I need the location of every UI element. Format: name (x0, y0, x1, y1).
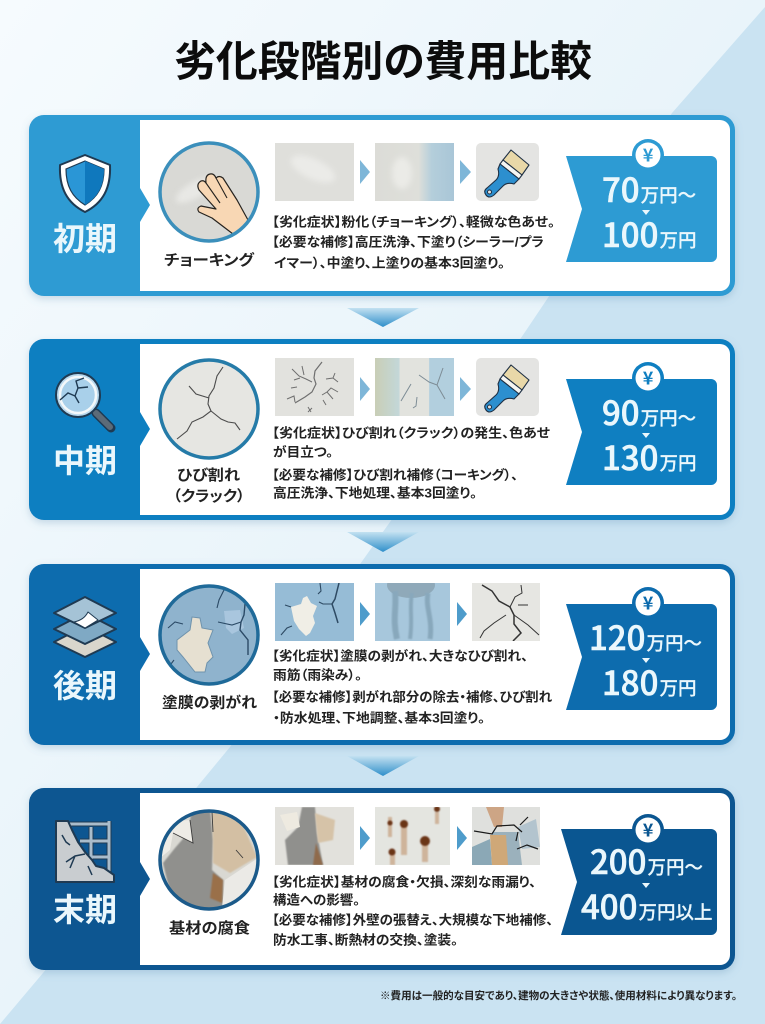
arrow (360, 377, 370, 401)
description: 【必要な補修】外壁の張替え、大規模な下地補修、 (272, 912, 553, 928)
caption: チョーキング (164, 251, 255, 269)
thumbnail: corroded wall (275, 807, 354, 865)
description: 防水工事、断熱材の交換、塗装。 (273, 932, 458, 948)
caption: 基材の腐食 (169, 919, 250, 937)
yen icon: ¥ (643, 142, 654, 168)
circle image: peeling paint (160, 586, 258, 684)
arrow (457, 602, 467, 626)
thumbnail: rain streaks (375, 583, 450, 641)
price badge: 120万円～ (589, 612, 702, 660)
icon: layers (54, 597, 116, 657)
stage label: 後期 (53, 668, 117, 704)
description (272, 648, 552, 726)
thumbnail: rust stains (375, 807, 450, 865)
panel frame: 末期 (29, 788, 735, 970)
description: 【劣化症状】塗膜の剥がれ、大きなひび割れ、 (272, 648, 528, 664)
circle image: chalking hand (160, 143, 258, 241)
price badge (566, 139, 717, 262)
arrow (347, 756, 419, 776)
description: 高圧洗浄、下地処理、基本3回塗り。 (273, 486, 477, 500)
description: 【必要な補修】剥がれ部分の除去・補修、ひび割れ (272, 690, 552, 704)
description (272, 874, 553, 948)
description (272, 214, 555, 270)
price badge: 180万円 (602, 657, 696, 705)
circle image: corroded substrate (160, 808, 258, 912)
description: 【劣化症状】基材の腐食・欠損、深刻な雨漏り、 (272, 874, 536, 890)
arrow (460, 160, 471, 184)
description: 【劣化症状】ひび割れ（クラック）の発生、色あせ (272, 426, 551, 440)
yen icon: ¥ (643, 590, 654, 616)
yen icon (632, 139, 664, 171)
arrow (347, 308, 419, 327)
white content area (140, 120, 730, 291)
caption (173, 467, 245, 505)
yen icon (632, 814, 664, 846)
arrow (347, 532, 419, 552)
white content area (140, 793, 730, 965)
description: が目立つ。 (273, 444, 333, 460)
thumbnail: repainting wall (375, 143, 454, 201)
price badge: 70万円～ (602, 164, 696, 212)
description: 【必要な補修】高圧洗浄、下塗り（シーラー/プラ (272, 234, 544, 250)
icon: paint brush (476, 143, 539, 201)
price badge: 90万円～ (602, 387, 696, 435)
price badge: 400万円以上 (581, 881, 712, 929)
description: イマー）、中塗り、上塗りの基本3回塗り。 (274, 256, 505, 270)
white content area (140, 344, 730, 515)
description: 【劣化症状】粉化（チョーキング）、軽微な色あせ。 (272, 214, 555, 230)
arrow (360, 826, 370, 850)
description: ・防水処理、下地調整、基本3回塗り。 (273, 710, 485, 726)
arrow (460, 377, 471, 401)
caption: （クラック） (173, 488, 245, 505)
panel: 後期 (29, 564, 735, 745)
footnote: ※費用は一般的な目安であり、建物の大きさや状態、使用材料により異なります。 (380, 989, 737, 1002)
price badge (566, 362, 717, 485)
thumbnail: damaged substrate (472, 807, 540, 865)
panel: 中期 (29, 339, 735, 520)
description (272, 426, 551, 500)
price badge: 130万円 (602, 432, 696, 480)
description: 【必要な補修】ひび割れ補修（コーキング）、 (272, 468, 518, 482)
description: 雨筋（雨染み）。 (273, 668, 362, 682)
thumbnail: peeling wall (275, 583, 354, 641)
caption: ひび割れ (177, 467, 240, 484)
thumbnail: partial repaint (375, 358, 454, 416)
description: 構造への影響。 (273, 892, 360, 908)
stage label: 中期 (53, 443, 117, 479)
caption: 塗膜の剥がれ (162, 694, 257, 712)
panel frame: 初期 (29, 115, 735, 296)
price badge (566, 587, 717, 710)
panel: 末期 (29, 788, 735, 970)
stage label: 末期 (53, 892, 117, 928)
yen icon: ¥ (643, 816, 654, 842)
panel frame: 中期 (29, 339, 735, 520)
price badge: 100万円 (602, 209, 696, 257)
stage label: 初期 (53, 221, 117, 257)
arrow (360, 602, 370, 626)
arrow (457, 826, 467, 850)
panel: 初期 (29, 115, 735, 296)
price badge (561, 814, 717, 935)
yen icon (632, 362, 664, 394)
circle image: crack (160, 360, 258, 458)
icon: magnifier (56, 373, 111, 428)
thumbnail: large cracks (472, 583, 540, 641)
panel frame: 後期 (29, 564, 735, 745)
yen icon (632, 587, 664, 619)
white content area (140, 569, 730, 740)
price badge: 200万円～ (590, 836, 703, 884)
title: 劣化段階別の費用比較 (174, 38, 592, 85)
icon: damaged building (56, 821, 114, 882)
yen icon: ¥ (643, 364, 654, 390)
thumbnail: cracks (275, 358, 354, 416)
arrow (360, 160, 370, 184)
thumbnail: chalky wall (275, 143, 354, 201)
icon: shield (60, 155, 110, 212)
icon: paint brush (476, 358, 539, 416)
